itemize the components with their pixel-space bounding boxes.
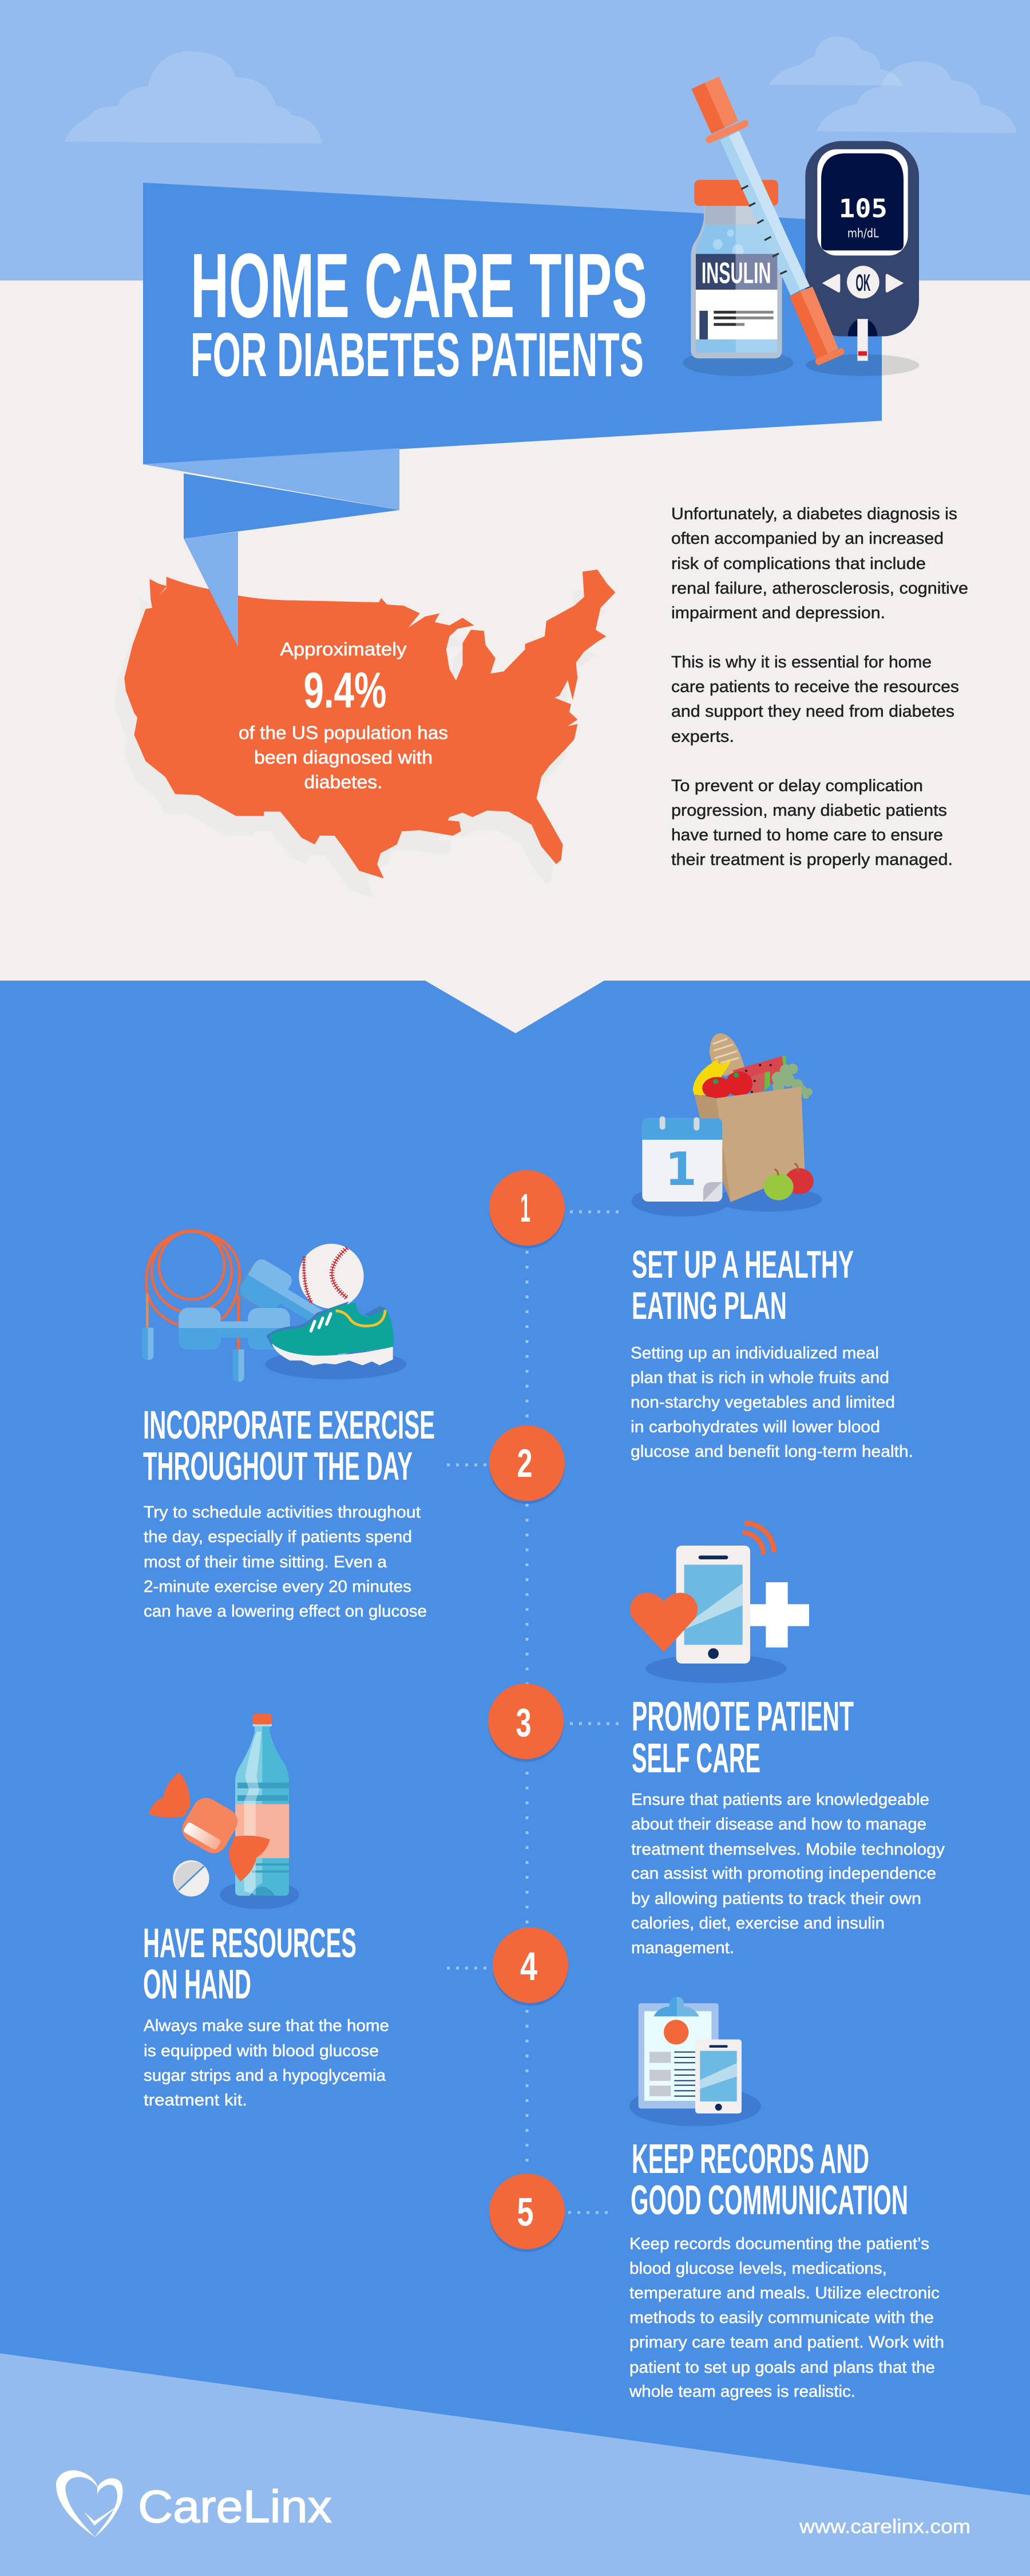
- intro text: experts.: [671, 728, 734, 746]
- step 1 text: SET UP A HEALTHY: [632, 1243, 854, 1286]
- footer band: [0, 2353, 1030, 2576]
- number 2: 2: [517, 1441, 532, 1485]
- step 2 text: Try to schedule activities throughout: [144, 1503, 421, 1522]
- step 5 text: whole team agrees is realistic.: [629, 2383, 855, 2401]
- icon: jump rope, dumbbells, baseball and shoe: [142, 1231, 406, 1382]
- step 4 text: Always make sure that the home: [144, 2017, 389, 2035]
- step 4 text: is equipped with blood glucose: [144, 2042, 379, 2060]
- step 3 text: calories, diet, exercise and insulin: [631, 1914, 885, 1933]
- website address: www.carelinx.com: [799, 2516, 970, 2538]
- glucose meter: mh/dL: [847, 226, 879, 240]
- intro text: risk of complications that include: [671, 555, 926, 573]
- icon: clipboard and phone: [629, 1997, 761, 2126]
- step 2 text: THROUGHOUT THE DAY: [143, 1444, 413, 1488]
- step 1 text: [631, 1243, 913, 1461]
- ribbon banner: [143, 183, 882, 539]
- step 3 text: by allowing patients to track their own: [631, 1890, 921, 1908]
- illustration: insulin vial, syringe and glucose meter: [683, 77, 919, 376]
- step 1 text: glucose and benefit long-term health.: [631, 1443, 913, 1461]
- timeline dotted line: [525, 1251, 529, 2172]
- glucose meter: [805, 141, 919, 361]
- map shape: [124, 570, 615, 878]
- map statistic text: Approximately: [280, 639, 406, 659]
- step 2 text: 2-minute exercise every 20 minutes: [144, 1578, 411, 1596]
- number 5: 5: [517, 2190, 533, 2234]
- map shadow: [114, 589, 605, 898]
- step 5 text: patient to set up goals and plans that the: [629, 2358, 935, 2377]
- map statistic text: been diagnosed with: [254, 747, 433, 768]
- step 4 text: sugar strips and a hypoglycemia: [144, 2067, 386, 2085]
- title: [191, 234, 647, 390]
- step 3 text: Ensure that patients are knowledgeable: [631, 1791, 929, 1809]
- glucose meter: 105: [839, 194, 888, 224]
- number 4: [493, 1927, 568, 2006]
- icon: water bottle, candy and pill: [149, 1714, 299, 1909]
- vial label: [696, 254, 777, 339]
- step 3 text: SELF CARE: [632, 1736, 760, 1781]
- step 3 text: about their disease and how to manage: [631, 1815, 926, 1834]
- step 3 text: [631, 1694, 945, 1957]
- step 5 text: blood glucose levels, medications,: [629, 2259, 887, 2278]
- syringe ticks and lower plunger: [742, 185, 841, 361]
- cream background: [0, 280, 1030, 981]
- intro text: [671, 505, 968, 869]
- intro text: impairment and depression.: [671, 604, 885, 622]
- intro text: progression, many diabetic patients: [671, 801, 947, 820]
- intro text: have turned to home care to ensure: [671, 826, 943, 844]
- icon: phone with heart and plus: [630, 1523, 809, 1683]
- insulin vial: [691, 180, 782, 358]
- map statistic text: of the US population has: [239, 722, 448, 743]
- number 3: [488, 1684, 564, 1762]
- glucose meter: OK: [855, 269, 871, 296]
- sky background: [0, 0, 1030, 280]
- number 5: [489, 2174, 565, 2252]
- step 5 text: methods to easily communicate with the: [629, 2309, 934, 2327]
- step 3 text: can assist with promoting independence: [631, 1864, 936, 1883]
- number 3: 3: [516, 1700, 531, 1745]
- clouds: [65, 37, 1017, 144]
- map of the United States: [114, 570, 615, 898]
- step 1 text: non-starchy vegetables and limited: [631, 1393, 895, 1412]
- map statistic text: 9.4%: [303, 662, 387, 718]
- intro text: Unfortunately, a diabetes diagnosis is: [671, 505, 957, 523]
- number 2: [489, 1425, 565, 1504]
- step 1 text: plan that is rich in whole fruits and: [631, 1369, 889, 1387]
- number 1: [489, 1170, 565, 1249]
- icon: groceries and calendar: 1: [665, 1143, 697, 1196]
- map statistic text: diabetes.: [304, 772, 382, 792]
- step 1 text: EATING PLAN: [632, 1284, 787, 1327]
- blue tips section: [0, 981, 1030, 2576]
- step 3 text: treatment themselves. Mobile technology: [631, 1840, 945, 1859]
- logo: CareLinx: [56, 2470, 332, 2537]
- step 3 text: management.: [631, 1939, 734, 1957]
- map statistic text: [239, 639, 448, 792]
- step 2 text: most of their time sitting. Even a: [144, 1553, 387, 1571]
- step 4 text: treatment kit.: [144, 2091, 247, 2109]
- title: HOME CARE TIPS: [191, 234, 647, 337]
- intro text: renal failure, atherosclerosis, cognitive: [671, 579, 968, 598]
- logo heart: [56, 2470, 123, 2537]
- step 2 text: the day, especially if patients spend: [144, 1528, 412, 1546]
- step 1 text: Setting up an individualized meal: [631, 1344, 879, 1362]
- intro text: This is why it is essential for home: [671, 653, 932, 671]
- ribbon tail: [184, 532, 238, 647]
- intro text: care patients to receive the resources: [671, 678, 959, 696]
- step 5 text: temperature and meals. Utilize electronic: [629, 2284, 940, 2302]
- intro text: often accompanied by an increased: [671, 530, 944, 548]
- step 1 text: in carbohydrates will lower blood: [631, 1418, 880, 1436]
- step 2 text: INCORPORATE EXERCISE: [143, 1402, 435, 1447]
- timeline connectors: [447, 1212, 620, 2212]
- step 4 text: HAVE RESOURCES: [143, 1921, 356, 1966]
- vial label: INSULIN: [702, 256, 771, 290]
- step 5 text: Keep records documenting the patient’s: [629, 2235, 929, 2253]
- step 4 text: [143, 1921, 389, 2109]
- step 5 text: [629, 2136, 944, 2401]
- step 4 text: ON HAND: [143, 1962, 251, 2008]
- syringe: [691, 77, 810, 295]
- step 5 text: primary care team and patient. Work with: [629, 2333, 944, 2352]
- number 4: 4: [520, 1944, 537, 1989]
- title: FOR DIABETES PATIENTS: [191, 320, 644, 390]
- number 1: 1: [520, 1186, 530, 1230]
- icon: groceries and calendar: [631, 1033, 822, 1216]
- step 2 text: [143, 1402, 435, 1621]
- logo: CareLinx: CareLinx: [138, 2481, 332, 2532]
- step 2 text: can have a lowering effect on glucose: [144, 1602, 427, 1621]
- intro text: To prevent or delay complication: [671, 777, 923, 795]
- intro text: and support they need from diabetes: [671, 702, 954, 721]
- step 3 text: PROMOTE PATIENT: [632, 1694, 854, 1740]
- intro text: their treatment is properly managed.: [671, 851, 953, 869]
